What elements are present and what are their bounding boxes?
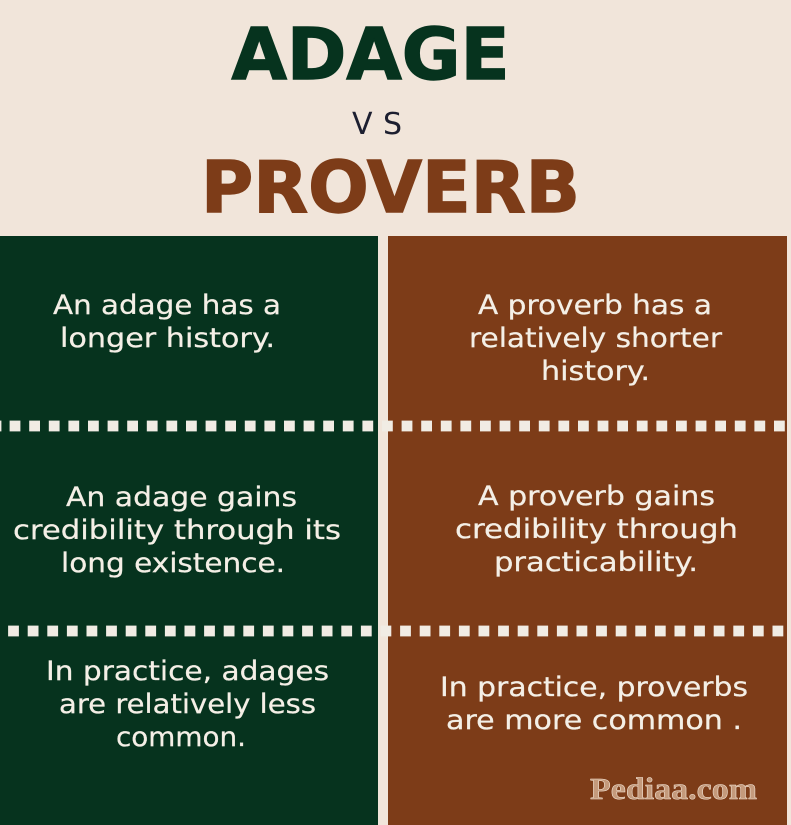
text: proverb credibility bbox=[455, 481, 738, 578]
text: adage practice bbox=[46, 656, 329, 753]
text: adage credibility: long existence. bbox=[61, 548, 285, 579]
logo: pediaa.com: Pediaa.com bbox=[590, 771, 757, 806]
text: adage credibility bbox=[13, 482, 341, 579]
divider: dotted row two bbox=[8, 626, 783, 636]
text: proverb credibility: A proverb gains bbox=[478, 481, 715, 512]
text: proverb practice: are more common . bbox=[446, 705, 742, 736]
text: proverb credibility: credibility through bbox=[455, 514, 738, 545]
text: adage history bbox=[53, 290, 281, 354]
text: proverb history bbox=[469, 290, 723, 387]
text: proverb history: relatively shorter bbox=[469, 323, 723, 354]
title: proverb: PROVERB bbox=[201, 146, 580, 229]
text: proverb credibility: practicability. bbox=[494, 547, 698, 578]
text: adage history: longer history. bbox=[60, 323, 275, 354]
text: adage practice: In practice, adages bbox=[46, 656, 329, 687]
text: proverb practice bbox=[440, 672, 748, 736]
title: adage: ADAGE bbox=[232, 13, 510, 96]
text: adage credibility: credibility through its bbox=[13, 515, 341, 546]
text: proverb practice: In practice, proverbs bbox=[440, 672, 748, 703]
text: adage practice: are relatively less bbox=[59, 689, 316, 720]
title: vs: VS bbox=[352, 107, 402, 142]
text: adage history: An adage has a bbox=[53, 290, 281, 321]
text: adage practice: common. bbox=[116, 722, 246, 753]
text: proverb history: A proverb has a bbox=[478, 290, 712, 321]
text: proverb history: history. bbox=[541, 356, 650, 387]
panel: adage bbox=[0, 236, 378, 825]
divider: dotted row one bbox=[0, 421, 784, 431]
text: adage credibility: An adage gains bbox=[66, 482, 297, 513]
panel: proverb bbox=[388, 236, 787, 825]
